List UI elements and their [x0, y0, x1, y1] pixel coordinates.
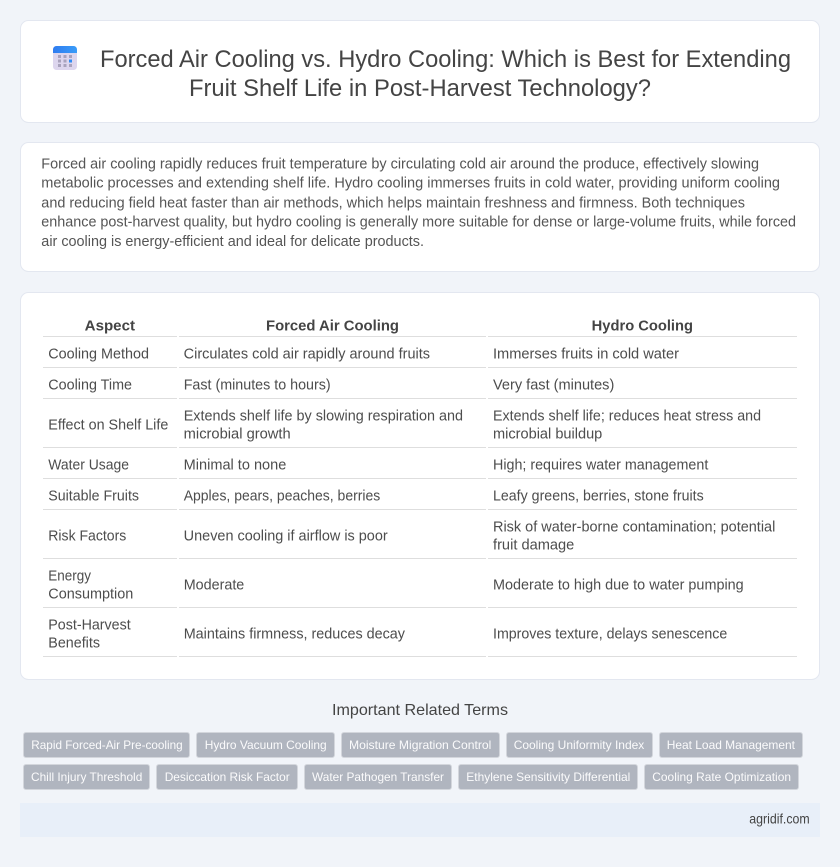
row: energy consumption: Moderate	[184, 577, 244, 593]
text block: introduction paragraph: metabolic processes and extending shelf life. Hydro cooling immerses fruits in cold water, providing uniform cooling	[41, 176, 780, 192]
tag: Moisture Migration Control	[349, 738, 491, 752]
row: energy consumption: Energy	[48, 569, 92, 585]
row: effect on shelf life: microbial growth	[184, 426, 291, 442]
row: cooling time	[48, 377, 614, 393]
title: Forced Air Cooling vs. Hydro Cooling: Which is Best for Extending	[100, 46, 791, 73]
row: suitable fruits	[48, 488, 704, 504]
tag	[156, 764, 298, 790]
row: post-harvest benefits: Post-Harvest	[48, 617, 131, 633]
text block: introduction paragraph: enhance post-harvest quality, but hydro cooling is generally more suitable for dense or large-volume fruits, while forced	[41, 214, 796, 230]
row: suitable fruits: Suitable Fruits	[48, 488, 139, 504]
panel: introduction	[20, 142, 820, 272]
row: post-harvest benefits: Maintains firmness, reduces decay	[184, 626, 406, 642]
row: risk factors: Risk of water-borne contamination; potential	[493, 520, 775, 536]
row: energy consumption	[48, 569, 744, 602]
row: energy consumption: Consumption	[48, 586, 133, 602]
tag: Water Pathogen Transfer	[312, 770, 444, 784]
tag: Cooling Rate Optimization	[652, 770, 791, 784]
row: cooling method	[48, 346, 679, 362]
row: effect on shelf life: Effect on Shelf Life	[48, 417, 168, 433]
text block: introduction paragraph: air cooling is energy-efficient and ideal for delicate products.	[41, 234, 424, 250]
row: risk factors: Risk Factors	[48, 528, 126, 544]
row: water usage: High; requires water management	[493, 457, 708, 473]
tag	[24, 764, 150, 790]
tag: Ethylene Sensitivity Differential	[466, 770, 630, 784]
row: post-harvest benefits: Improves texture, delays senescence	[493, 626, 727, 642]
table header row: Aspect	[85, 319, 135, 335]
icon: calendar	[53, 46, 77, 70]
tag	[458, 764, 638, 790]
row: risk factors: fruit damage	[493, 537, 574, 553]
row: cooling time: Fast (minutes to hours)	[184, 377, 331, 393]
row: post-harvest benefits: Benefits	[48, 635, 100, 651]
row: post-harvest benefits	[48, 617, 727, 651]
panel: comparison table	[20, 292, 820, 680]
row: water usage: Minimal to none	[184, 457, 286, 473]
row: risk factors	[48, 520, 775, 553]
tag: Chill Injury Threshold	[31, 770, 142, 784]
row: effect on shelf life: microbial buildup	[493, 426, 602, 442]
title: Fruit Shelf Life in Post-Harvest Technology?	[189, 75, 651, 102]
table header row: Forced Air Cooling	[266, 319, 399, 335]
row: energy consumption: Moderate to high due to water pumping	[493, 577, 744, 593]
tag: Heat Load Management	[667, 738, 796, 752]
row: effect on shelf life	[48, 409, 761, 442]
panel: title header	[20, 20, 820, 122]
tag	[506, 732, 652, 758]
row: cooling method: Immerses fruits in cold water	[493, 346, 679, 362]
row: effect on shelf life: Extends shelf life by slowing respiration and	[184, 409, 463, 425]
footer bar	[20, 803, 820, 837]
table header row: Hydro Cooling	[592, 319, 693, 335]
tag	[196, 732, 334, 758]
title	[100, 46, 791, 102]
row: suitable fruits: Leafy greens, berries, stone fruits	[493, 488, 704, 504]
table header row	[85, 319, 693, 335]
tag: Hydro Vacuum Cooling	[205, 738, 327, 752]
tag	[304, 764, 452, 790]
row: effect on shelf life: Extends shelf life; reduces heat stress and	[493, 409, 761, 425]
panel: related term tags	[24, 732, 802, 790]
row: risk factors: Uneven cooling if airflow is poor	[184, 528, 388, 544]
row: water usage: Water Usage	[48, 457, 129, 473]
tag	[660, 732, 802, 758]
tag	[644, 764, 798, 790]
tag	[24, 732, 190, 758]
text block: introduction paragraph: and reducing field heat faster than air methods, which helps maintain freshness and firmness. Both techniques	[41, 195, 745, 211]
text block: introduction paragraph: Forced air cooling rapidly reduces fruit temperature by circulating cold air around the produce, effectively slowing	[41, 156, 759, 172]
footer bar: agridif.com	[749, 810, 810, 826]
text block: introduction paragraph	[41, 156, 796, 250]
row: cooling method: Circulates cold air rapidly around fruits	[184, 346, 430, 362]
row: cooling method: Cooling Method	[48, 346, 149, 362]
tag	[342, 732, 500, 758]
row: cooling time: Cooling Time	[48, 377, 132, 393]
heading: important related terms: Important Related Terms	[332, 702, 508, 719]
tag: Rapid Forced-Air Pre-cooling	[31, 738, 183, 752]
row: water usage	[48, 457, 708, 473]
row: cooling time: Very fast (minutes)	[493, 377, 614, 393]
tag: Desiccation Risk Factor	[165, 770, 290, 784]
row: suitable fruits: Apples, pears, peaches, berries	[184, 488, 380, 504]
tag: Cooling Uniformity Index	[514, 738, 644, 752]
